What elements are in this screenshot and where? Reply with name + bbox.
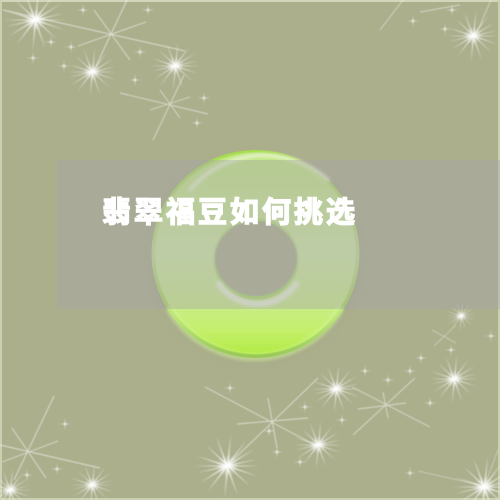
- sparkles: top right: [380, 0, 498, 62]
- sparkles: bottom right: [196, 301, 500, 500]
- sparkles: bottom left: [0, 396, 113, 500]
- ring hole: [216, 222, 296, 296]
- sparkles: top left: [3, 0, 210, 140]
- title: 翡翠福豆如何挑选: [102, 196, 358, 229]
- translucent banner: [57, 160, 500, 309]
- jade ring shadow: [152, 155, 358, 361]
- jade donut pendant: [151, 150, 359, 358]
- ring highlights: [170, 155, 340, 357]
